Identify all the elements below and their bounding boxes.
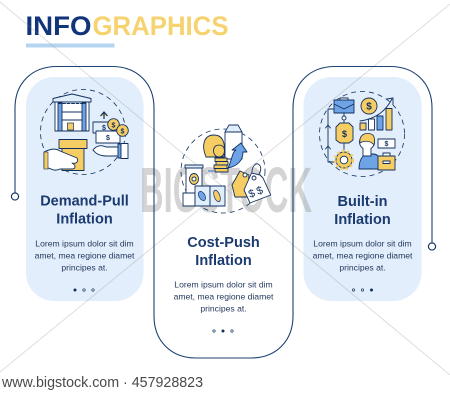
heading: built-in: Built-in — [338, 194, 387, 210]
text block: demand-pull: principes at. — [61, 262, 108, 272]
heading: demand-pull: Inflation — [56, 212, 113, 228]
icon: cost chain and worker — [320, 92, 404, 176]
heading: built-in: Inflation — [334, 212, 391, 228]
text block: built-in: principes at. — [339, 262, 386, 272]
footer source line: www.bigstock.com · 457928823 — [1, 374, 203, 391]
title: GRAPHICS — [92, 11, 228, 41]
pagination dots: cost-push — [213, 330, 233, 332]
icon: warehouse, goods and money: $ — [106, 135, 110, 142]
text block: cost-push: principes at. — [200, 304, 247, 314]
connecting outline — [15, 66, 432, 358]
text block: cost-push: Lorem ipsum dolor sit dim — [174, 280, 273, 290]
text block: cost-push: amet, mea regione diamet — [174, 292, 274, 302]
text block: demand-pull: Lorem ipsum dolor sit dim — [35, 238, 134, 248]
pagination dots: built-in — [352, 288, 373, 292]
icon: warehouse, goods and money — [40, 90, 128, 174]
icon: food, barrel and price tags — [181, 125, 271, 213]
icon: warehouse, goods and money: $ — [121, 128, 125, 135]
icon: food, barrel and price tags: $ — [247, 187, 257, 201]
heading: demand-pull: Demand-Pull — [40, 194, 129, 210]
icon: cost chain and worker: $ — [342, 129, 347, 139]
text block: built-in: amet, mea regione diamet — [313, 250, 413, 260]
icon: warehouse, goods and money: $ — [112, 122, 116, 129]
end node — [428, 243, 436, 250]
title underline — [26, 44, 114, 48]
text block: demand-pull: amet, mea regione diamet — [35, 250, 135, 260]
title — [26, 11, 228, 41]
panel: built-in background — [304, 77, 422, 301]
text block: built-in: Lorem ipsum dolor sit dim — [313, 238, 412, 248]
heading: cost-push: Cost-Push — [187, 235, 260, 251]
panel: demand-pull background — [26, 77, 144, 301]
start node — [11, 193, 19, 200]
title: INFO — [26, 11, 92, 41]
heading: cost-push: Inflation — [195, 253, 252, 269]
pagination dots: demand-pull — [74, 288, 94, 292]
icon: cost chain and worker: $ — [366, 102, 372, 112]
icon: food, barrel and price tags: $ — [255, 184, 265, 198]
icon: warehouse, goods and money: $ — [102, 125, 106, 132]
icon: cost chain and worker: $ — [385, 141, 389, 148]
